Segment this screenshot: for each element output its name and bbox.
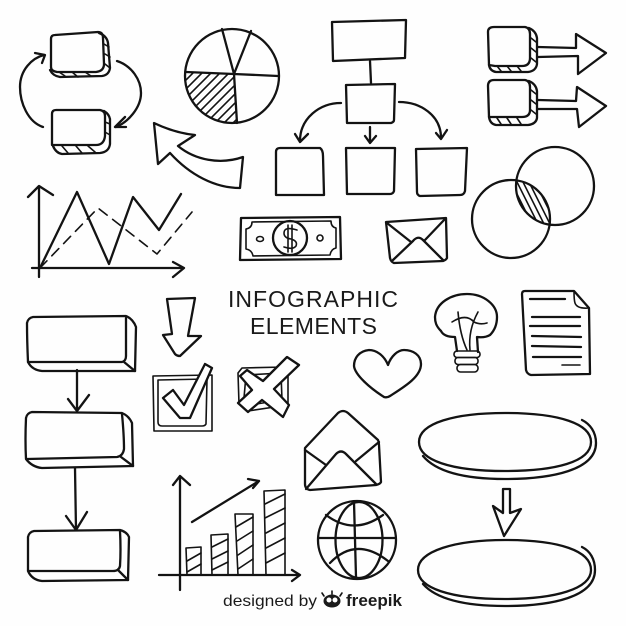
ovals with arrow bbox=[418, 413, 596, 606]
hatched pie slice bbox=[186, 73, 236, 122]
freepik credit bbox=[223, 591, 403, 610]
arrow: cycle left bbox=[20, 53, 45, 127]
title: INFOGRAPHIC bbox=[228, 286, 398, 312]
checkbox icon bbox=[153, 364, 212, 431]
pie chart bbox=[184, 28, 280, 124]
box: step 2 bbox=[26, 412, 133, 468]
cross box icon bbox=[238, 357, 299, 417]
arrow: centre branch bbox=[365, 127, 376, 143]
box: step 3 bbox=[28, 530, 129, 581]
box: cycle bottom bbox=[52, 110, 110, 154]
arrow: step 2 to 3 bbox=[66, 468, 87, 530]
globe icon bbox=[318, 501, 396, 579]
bars bbox=[186, 490, 285, 575]
big curved arrow bbox=[154, 123, 243, 188]
arrow: step 1 to 2 bbox=[68, 370, 89, 411]
arrow down bbox=[493, 489, 521, 536]
venn diagram bbox=[472, 147, 594, 258]
title bbox=[228, 286, 398, 339]
down arrow outline bbox=[163, 298, 201, 356]
arrow: right branch bbox=[399, 102, 447, 139]
box: top bbox=[332, 20, 406, 61]
freepik logo bbox=[322, 591, 342, 608]
box: child right bbox=[416, 148, 467, 196]
connector bbox=[370, 61, 371, 83]
open envelope icon bbox=[305, 411, 381, 490]
cycle diagram bbox=[20, 32, 141, 154]
oval bottom bbox=[418, 540, 595, 606]
two boxes with arrows bbox=[488, 27, 606, 127]
line chart bbox=[28, 186, 192, 277]
box: cycle top bbox=[50, 32, 110, 77]
bar chart bbox=[159, 476, 300, 590]
freepik credit: designed by bbox=[223, 593, 317, 610]
oval top bbox=[419, 413, 596, 479]
hatched overlap bbox=[517, 182, 549, 224]
freepik credit: freepik bbox=[346, 591, 403, 610]
heart icon bbox=[354, 350, 421, 397]
box with arrow: bottom bbox=[488, 80, 606, 127]
box: child centre bbox=[346, 148, 395, 194]
box: step 1 bbox=[27, 316, 136, 371]
banknote icon bbox=[240, 217, 341, 260]
box: child left bbox=[276, 148, 324, 195]
closed envelope icon bbox=[386, 218, 447, 263]
flowchart left bbox=[26, 316, 136, 581]
box: middle bbox=[346, 84, 395, 123]
arrow: left branch bbox=[295, 103, 341, 142]
org chart bbox=[276, 20, 467, 196]
title: ELEMENTS bbox=[250, 313, 377, 339]
light bulb icon bbox=[435, 294, 497, 372]
box with arrow: top bbox=[488, 27, 606, 74]
document icon bbox=[522, 291, 590, 375]
arrow: cycle right bbox=[115, 61, 141, 127]
